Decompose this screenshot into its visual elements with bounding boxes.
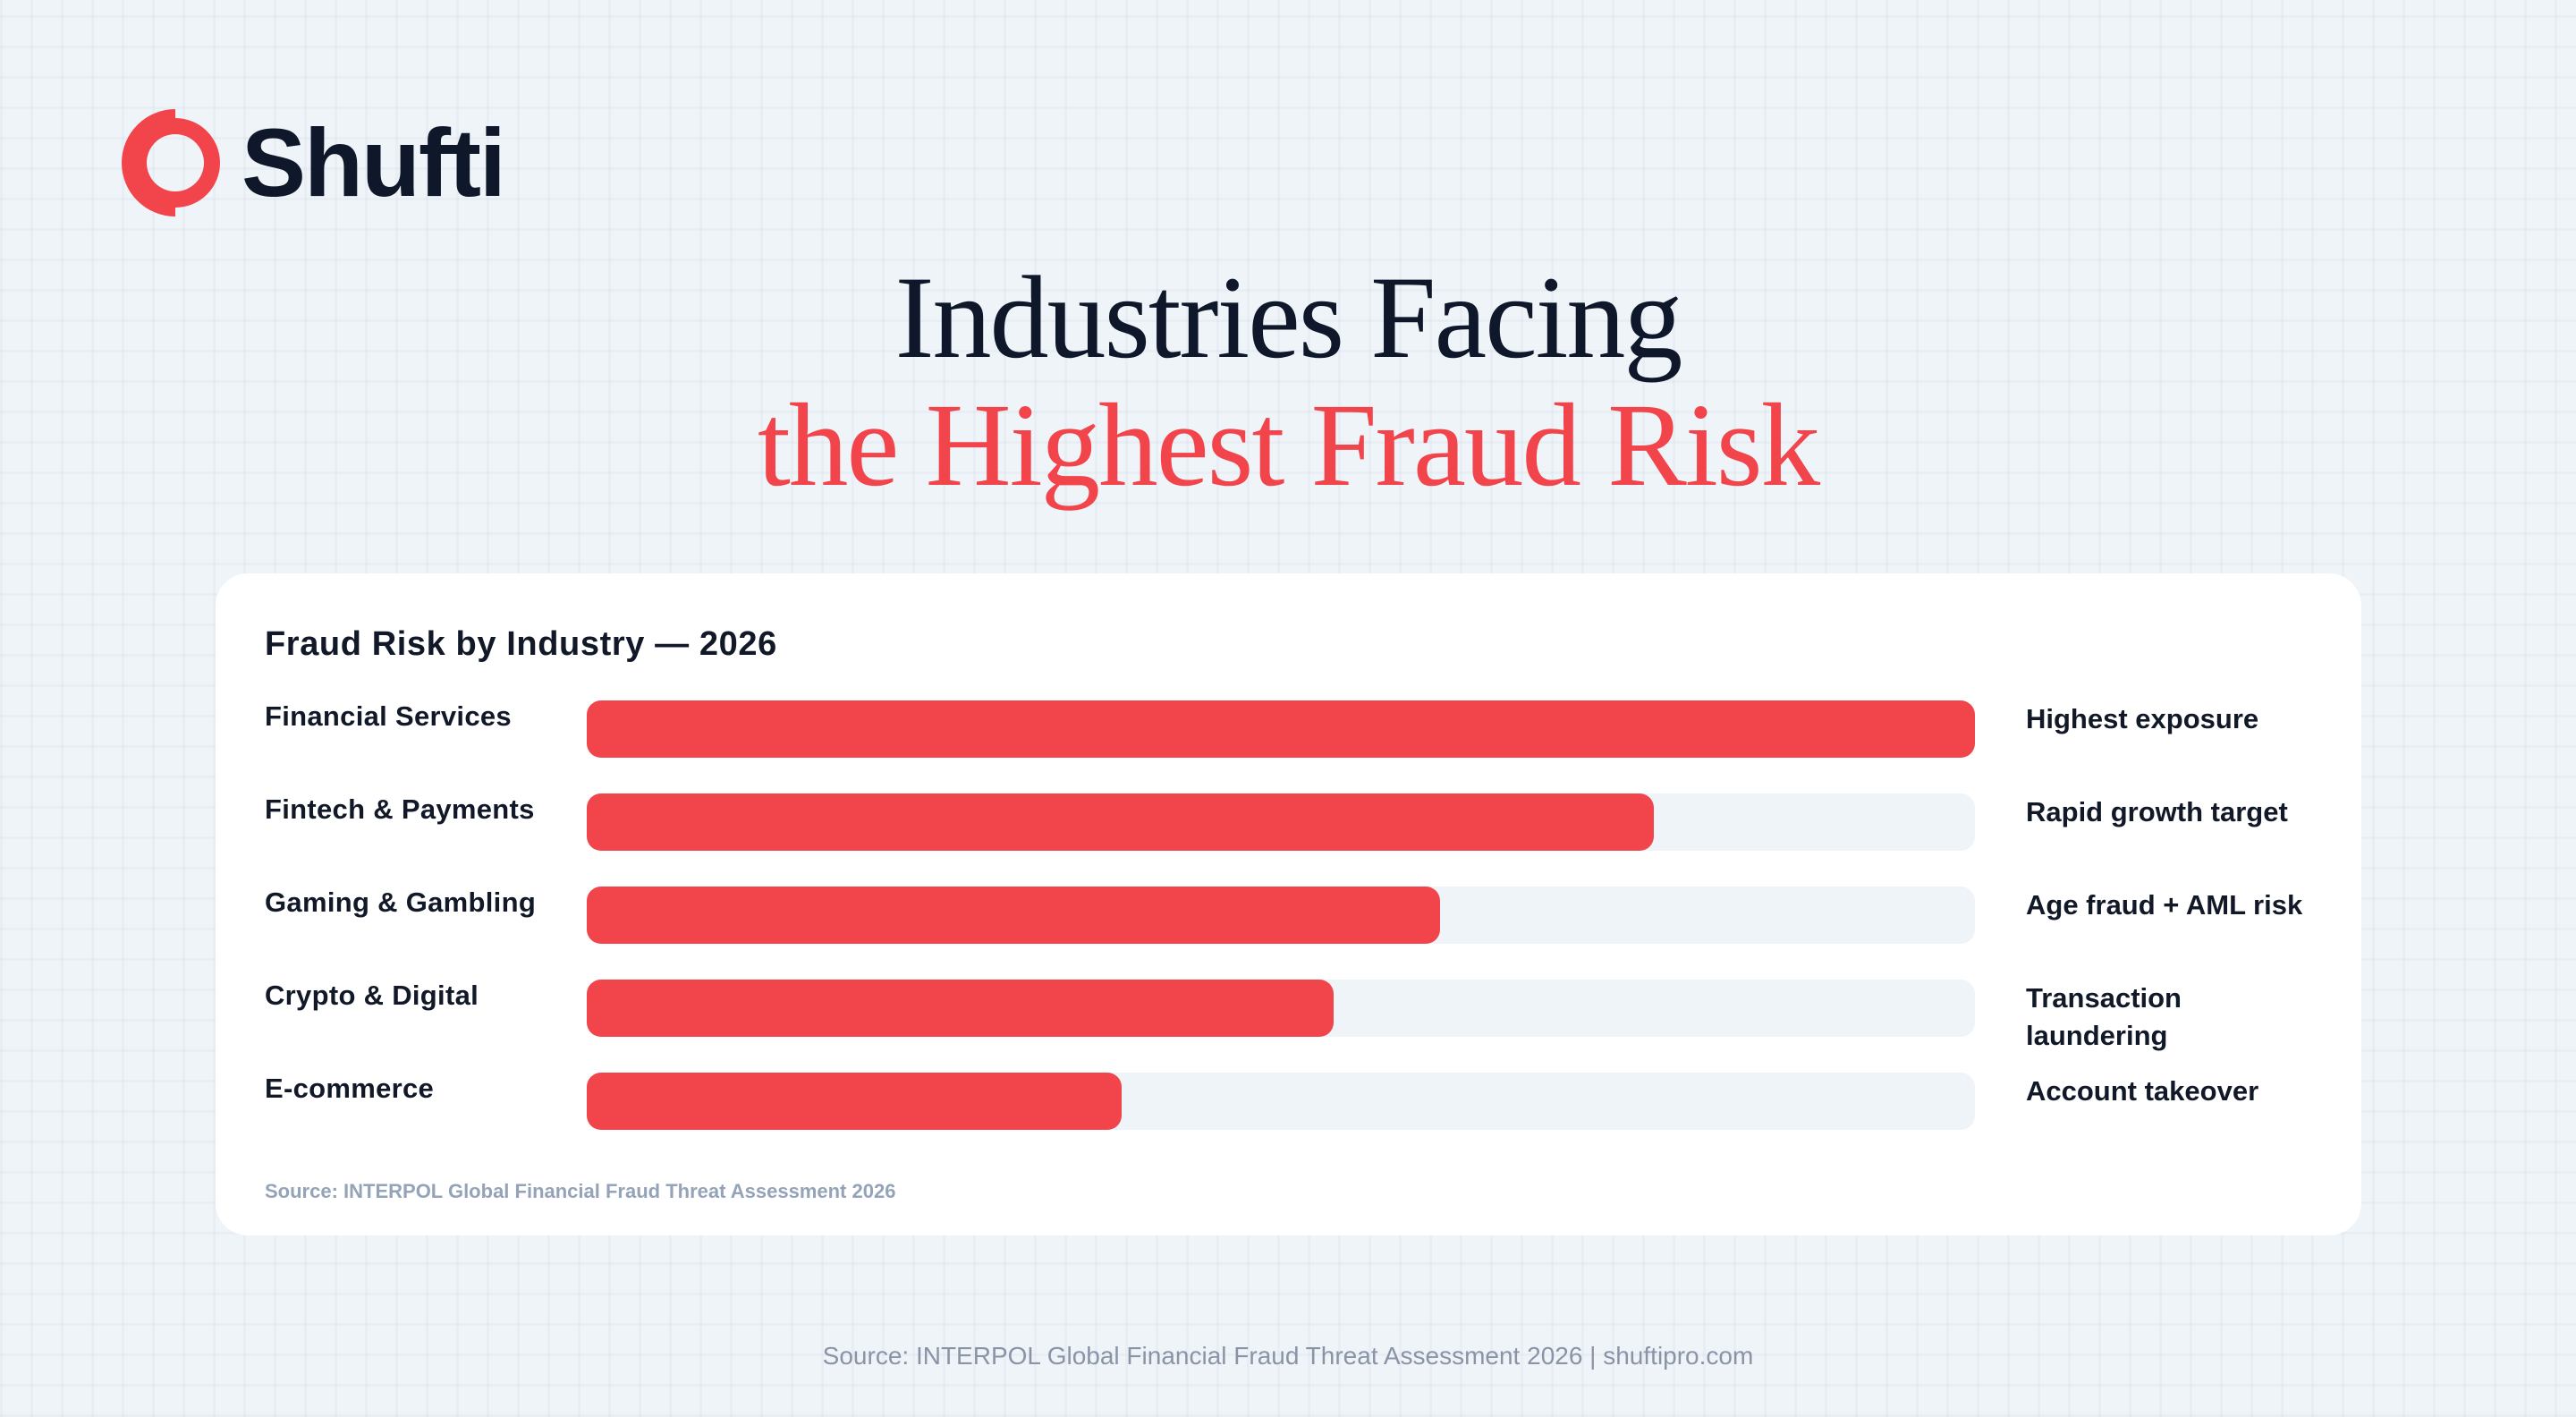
row: E-commerce [265, 1073, 2258, 1130]
row: Crypto [265, 980, 2182, 1051]
panel: chart card [216, 573, 2361, 1235]
row: Gaming: Age fraud + AML risk [2026, 889, 2302, 921]
title: Industries Facing [895, 251, 1681, 383]
row: Crypto: Transaction [2026, 982, 2182, 1014]
row: E-commerce: Account takeover [2026, 1075, 2258, 1107]
row: Fintech: Fintech & Payments [265, 793, 535, 825]
logo [122, 108, 504, 216]
row: Crypto: Crypto & Digital [265, 980, 479, 1011]
row: Financial Services: Highest exposure [2026, 703, 2258, 734]
footer source: Source: INTERPOL Global Financial Fraud Threat Assessment 2026 | shuftipro.com [823, 1342, 1753, 1370]
row: Fintech: Rapid growth target [2026, 796, 2288, 827]
card source: Source: INTERPOL Global Financial Fraud Threat Assessment 2026 [265, 1180, 895, 1202]
row: Gaming [265, 887, 2302, 944]
row: Fintech [265, 793, 2288, 851]
row: Crypto: laundering [2026, 1020, 2167, 1051]
icon: logo ring [122, 109, 220, 216]
subtitle red: the Highest Fraud Risk [758, 378, 1818, 511]
row: Financial Services: Financial Services [265, 700, 512, 732]
row: E-commerce: E-commerce [265, 1073, 434, 1104]
row: Gaming: Gaming & Gambling [265, 887, 536, 918]
wordmark: Shufti [242, 108, 504, 216]
chart heading: Fraud Risk by Industry — 2026 [265, 625, 777, 663]
row: Financial Services [265, 700, 2258, 758]
